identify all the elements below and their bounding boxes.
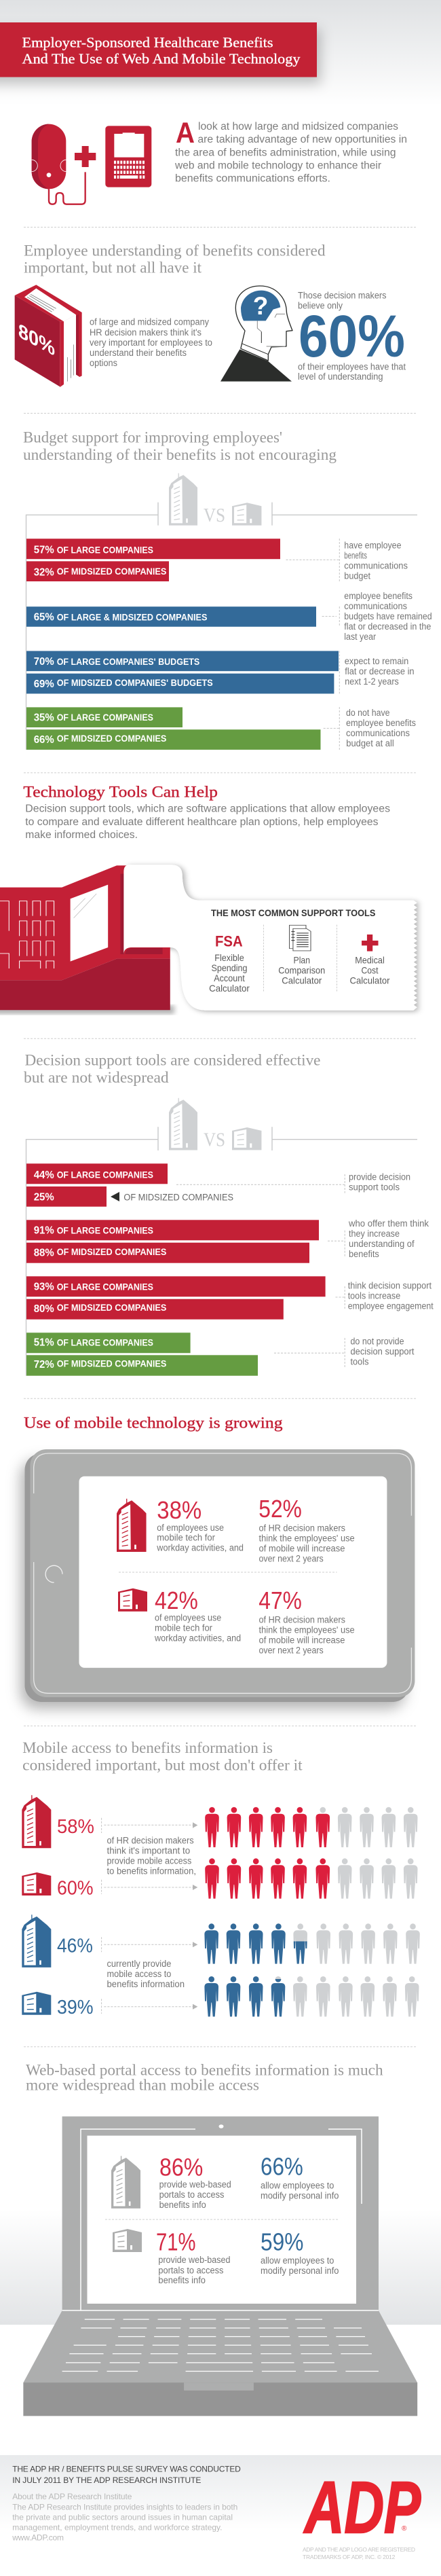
bar: 25% midsized: [26, 1186, 233, 1207]
footer: about the institute: the private and public sectors around issues in human capital: [12, 2513, 233, 2522]
heading: employee understanding: [24, 242, 326, 276]
bar: 57% large: OF LARGE COMPANIES: [57, 545, 153, 555]
stat: 60%: [298, 291, 406, 382]
people row: 39% midsized: [204, 1976, 419, 2016]
stat text: 80% of HR decision makers: [90, 316, 212, 368]
bar: 32% midsized: OF MIDSIZED COMPANIES: [57, 566, 166, 577]
stat: large companies using mobile: of HR decision makers: [259, 1523, 345, 1534]
stat: midsized companies using mobile: of HR decision makers: [259, 1614, 345, 1625]
large vs midsized header: [26, 1098, 417, 1376]
stat: midsized companies portals: portals to access: [158, 2265, 224, 2275]
bar annotations: budget: [286, 539, 432, 750]
card: [123, 865, 417, 1011]
stat: large companies using mobile: 52%: [258, 1495, 302, 1523]
title banner: And The Use of Web And Mobile Technology: [22, 50, 301, 67]
bar: 51% large: OF LARGE COMPANIES: [57, 1337, 153, 1347]
stat: large companies portals: 66%: [261, 2152, 303, 2180]
bar annotations: budget: communications: [346, 728, 410, 738]
footer: survey note: [12, 2465, 241, 2485]
stat: midsized companies using mobile: mobile tech for: [155, 1623, 212, 1633]
stat: midsized companies portals: modify personal info: [261, 2266, 339, 2276]
stat: midsized companies using mobile: of employees use: [155, 1613, 221, 1623]
stat: midsized companies portals: 59%: [261, 2228, 303, 2256]
bar annotations: budget: next 1-2 years: [345, 676, 399, 687]
bar annotations: decision tools: understanding of: [349, 1239, 415, 1249]
heading: budget support: understanding of their benefits is not encouraging: [23, 446, 337, 463]
bar: 66% midsized: 66%: [34, 734, 54, 746]
bar: 72% midsized: [26, 1355, 258, 1376]
ADP logo: ®: [402, 2525, 407, 2533]
bar: 57% large: 57%: [34, 545, 54, 556]
stat: midsized companies using mobile: over next 2 years: [259, 1645, 324, 1655]
bar annotations: budget: employee benefits: [344, 591, 413, 601]
stat: midsized companies portals: [113, 2228, 339, 2285]
stat: large companies using mobile: over next 2 years: [259, 1554, 324, 1564]
intro paragraph: the area of benefits administration, while using: [175, 147, 396, 158]
heading: use of mobile technology: Use of mobile technology is growing: [24, 1415, 283, 1432]
stat: large companies portals: modify personal info: [261, 2191, 339, 2201]
bar: 93% large: 93%: [34, 1281, 54, 1292]
illustration: building and support tools card: Medical: [355, 954, 385, 965]
trademark note: TRADEMARKS OF ADP, INC. © 2012: [303, 2554, 396, 2560]
heading: decision support tools effective: [24, 1051, 320, 1086]
bar annotations: decision tools: provide decision: [349, 1172, 410, 1182]
bar: 57% large: [26, 539, 280, 559]
heading: mobile access: [22, 1739, 303, 1774]
title banner: Employer-Sponsored Healthcare Benefits: [22, 35, 273, 51]
stat: large companies using mobile: 38%: [157, 1496, 202, 1524]
stat text: 80% of HR decision makers: HR decision makers think it's: [90, 327, 202, 338]
bar: 65% large and midsized: 65%: [34, 611, 54, 623]
red stats: important to provide mobile access: think it's important to: [107, 1845, 190, 1855]
bar: 69% midsized budgets: 69%: [34, 678, 54, 690]
trademark note: [303, 2546, 415, 2560]
illustration: building and support tools card: Cost: [361, 964, 379, 975]
icon: head with question mark: [220, 286, 292, 382]
bar: 51% large: [26, 1332, 191, 1353]
bar annotations: budget: communications: [344, 561, 408, 570]
bar: 70% large budgets: OF LARGE COMPANIES' BUDGETS: [57, 657, 199, 667]
intro paragraph: are taking advantage of new opportunities in: [197, 134, 407, 145]
stat: midsized companies portals: provide web-based: [158, 2255, 231, 2265]
heading: decision support tools effective: Decision support tools are considered effective: [24, 1051, 320, 1068]
red stats: important to provide mobile access: 58%: [57, 1816, 94, 1838]
bar annotations: budget: budgets have remained: [344, 611, 432, 621]
blue stats: currently provide mobile access: currently provide: [107, 1959, 171, 1969]
building lower base and flap: [0, 947, 170, 1010]
stat: 60%: Those decision makers: [298, 291, 387, 301]
stat: midsized companies portals: benefits info: [158, 2275, 206, 2285]
heading: technology tools can help: Technology Tools Can Help: [23, 783, 218, 800]
bar: 88% midsized: OF MIDSIZED COMPANIES: [57, 1247, 166, 1257]
heading: mobile access: Mobile access to benefits information is: [22, 1739, 273, 1756]
blue stats: currently provide mobile access: [22, 1915, 197, 2018]
stat text: 80% of HR decision makers: options: [90, 358, 117, 368]
intro paragraph: A: [176, 117, 195, 149]
bar: 44% large: [26, 1163, 168, 1184]
bar: 25% midsized: OF MIDSIZED COMPANIES: [123, 1192, 233, 1202]
icon: medical cross: [362, 935, 379, 951]
tablet body: [24, 1449, 415, 1702]
bar: 69% midsized budgets: [26, 674, 334, 693]
heading: mobile access: considered important, but most don't offer it: [22, 1757, 303, 1774]
bar: 66% midsized: OF MIDSIZED COMPANIES: [57, 733, 166, 744]
bar annotations: decision tools: they increase: [349, 1229, 400, 1239]
bar: 32% midsized: [26, 561, 169, 581]
illustration: building and support tools card: FSA: [215, 932, 243, 949]
icon: book with 80%: [15, 285, 82, 387]
icon: medical mouse and tablet: [32, 124, 151, 204]
blue stats: currently provide mobile access: 39%: [57, 1997, 94, 2018]
intro paragraph: [174, 117, 407, 184]
bar: 91% large: 91%: [34, 1225, 54, 1237]
icon: book with 80%: 80%: [18, 319, 55, 361]
stat: large companies using mobile: mobile tech for: [157, 1533, 215, 1543]
illustration: building and support tools card: Spending: [212, 962, 247, 973]
stat: midsized companies using mobile: workday activities, and: [154, 1633, 241, 1644]
bar: 32% midsized: 32%: [34, 566, 54, 579]
bar annotations: decision tools: think decision support: [348, 1281, 432, 1291]
stat: large companies using mobile: of mobile will increase: [259, 1544, 345, 1554]
illustration: building and support tools card: THE MOST COMMON SUPPORT TOOLS: [211, 908, 375, 918]
stat: large companies using mobile: [117, 1495, 355, 1564]
stat: midsized companies using mobile: think the employees' use: [259, 1625, 355, 1635]
large vs midsized header: [26, 473, 417, 750]
stat: midsized companies using mobile: 42%: [155, 1586, 198, 1614]
stat: large companies portals: provide web-based: [159, 2179, 231, 2190]
icon: plan documents: [290, 925, 311, 951]
footer: about the institute: www.ADP.com: [12, 2533, 64, 2542]
paragraph: decision support tools: make informed choices.: [25, 829, 138, 841]
bar: 44% large: OF LARGE COMPANIES: [57, 1170, 153, 1180]
bar annotations: decision tools: [176, 1172, 434, 1368]
building upper facade: [0, 865, 132, 980]
illustration: building and support tools card: Plan: [294, 954, 310, 965]
bar: 88% midsized: 88%: [34, 1247, 54, 1258]
footer: survey note: IN JULY 2011 BY THE ADP RESEARCH INSTITUTE: [12, 2475, 201, 2485]
laptop illustration: [23, 2116, 417, 2416]
heading: budget support: Budget support for improving employees': [23, 429, 282, 446]
bar: 70% large budgets: [26, 651, 339, 671]
large vs midsized header: VS: [204, 1129, 225, 1150]
bar: 35% large: 35%: [34, 712, 54, 724]
stat: large companies portals: [111, 2152, 339, 2210]
stat: midsized companies using mobile: [118, 1586, 355, 1655]
illustration: building and support tools card: [0, 865, 417, 1014]
stat: midsized companies using mobile: 47%: [258, 1586, 302, 1614]
red stats: important to provide mobile access: of HR decision makers: [107, 1835, 194, 1845]
stat: large companies using mobile: workday activities, and: [156, 1542, 244, 1553]
intro paragraph: look at how large and midsized companies: [198, 121, 398, 132]
bar annotations: decision tools: tools increase: [348, 1291, 400, 1301]
icon: head with question mark: ?: [253, 292, 268, 320]
bar: 72% midsized: 72%: [34, 1359, 54, 1371]
heading: budget support: [23, 429, 337, 463]
bar annotations: decision tools: do not provide: [350, 1336, 404, 1346]
bar annotations: budget: last year: [344, 632, 377, 642]
stat: 60%: believe only: [298, 301, 343, 311]
bar: 80% midsized: OF MIDSIZED COMPANIES: [57, 1303, 166, 1313]
people row: 60% midsized: [205, 1858, 418, 1899]
stat text: 80% of HR decision makers: understand their benefits: [90, 348, 187, 358]
bar annotations: budget: communications: [344, 601, 407, 611]
bar annotations: decision tools: employee engagement: [348, 1301, 434, 1311]
footer: about the institute: About the ADP Research Institute: [12, 2492, 132, 2501]
bar annotations: budget: expect to remain: [345, 656, 408, 666]
intro paragraph: benefits communications efforts.: [175, 173, 330, 184]
stat text: 80% of HR decision makers: very important for employees to: [90, 338, 212, 348]
intro paragraph: web and mobile technology to enhance their: [174, 160, 381, 171]
bar annotations: budget: do not have: [346, 708, 389, 718]
bar annotations: budget: flat or decrease in: [345, 666, 415, 676]
bar chart: budget support: [26, 539, 339, 750]
footer: survey note: THE ADP HR / BENEFITS PULSE SURVEY WAS CONDUCTED: [12, 2465, 241, 2474]
bar annotations: budget: budget: [344, 570, 370, 581]
bar annotations: decision tools: who offer them think: [348, 1218, 429, 1229]
footer: about the institute: management, employment trends, and workforce strategy.: [12, 2523, 222, 2533]
large vs midsized header: VS: [204, 505, 225, 526]
bar annotations: budget: benefits: [344, 550, 367, 561]
bar annotations: budget: have employee: [344, 541, 402, 550]
bar: 80% midsized: [26, 1299, 284, 1320]
stat: large companies portals: 86%: [159, 2153, 203, 2181]
blue stats: currently provide mobile access: 46%: [57, 1935, 93, 1957]
bar annotations: budget: budget at all: [346, 738, 394, 748]
stat: 60%: 60%: [299, 304, 405, 369]
stat: large companies portals: portals to access: [159, 2190, 225, 2200]
red stats: important to provide mobile access: provide mobile access: [107, 1855, 192, 1866]
bar: 93% large: OF LARGE COMPANIES: [57, 1282, 153, 1292]
bar: 88% midsized: [26, 1243, 309, 1263]
people row: 46% large: [204, 1923, 420, 1964]
stat text: 80% of HR decision makers: of large and midsized company: [90, 316, 209, 327]
laptop lid: [62, 2116, 379, 2310]
stat: large companies portals: benefits info: [159, 2200, 206, 2210]
heading: employee understanding: Employee understanding of benefits considered: [24, 242, 326, 259]
heading: web-based portal access: Web-based portal access to benefits information is much: [26, 2062, 383, 2079]
bar: 72% midsized: OF MIDSIZED COMPANIES: [57, 1358, 166, 1368]
bar annotations: decision tools: support tools: [349, 1182, 400, 1192]
bar: 51% large: 51%: [34, 1337, 54, 1348]
bar annotations: budget: flat or decreased in the: [344, 621, 431, 632]
blue stats: currently provide mobile access: mobile access to: [107, 1969, 171, 1979]
stat: midsized companies portals: allow employees to: [261, 2255, 334, 2266]
footer: about the institute: The ADP Research Institute provides insights to leaders in both: [12, 2502, 237, 2511]
illustration: building and support tools card: Flexible: [214, 952, 244, 963]
trademark note: ADP AND THE ADP LOGO ARE REGISTERED: [303, 2546, 415, 2553]
bar annotations: decision tools: decision support: [350, 1346, 415, 1356]
bar annotations: decision tools: benefits: [349, 1249, 379, 1259]
bar: 65% large and midsized: [26, 606, 316, 627]
building shadow: [0, 1005, 174, 1014]
stat: large companies using mobile: of employees use: [157, 1523, 224, 1533]
laptop base and keyboard: [23, 2310, 417, 2416]
illustration: building and support tools card: Account: [214, 973, 245, 983]
stat: 60%: level of understanding: [298, 371, 383, 382]
bar: 25% midsized: 25%: [34, 1192, 54, 1203]
blue stats: currently provide mobile access: benefits information: [107, 1979, 185, 1989]
bar: 66% midsized: [26, 729, 320, 750]
bar: 70% large budgets: 70%: [34, 656, 54, 668]
red stats: important to provide mobile access: to benefits information,: [107, 1866, 196, 1876]
people row: 58% large: [205, 1807, 418, 1847]
stat: midsized companies portals: 71%: [156, 2228, 195, 2256]
bar: 93% large: [26, 1276, 326, 1296]
illustration: building and support tools card: Calculator: [209, 983, 250, 994]
footer: about the institute: [12, 2492, 237, 2542]
red stats: important to provide mobile access: [22, 1795, 197, 1899]
bar annotations: budget: employee benefits: [346, 718, 416, 728]
stat: large companies portals: allow employees to: [261, 2180, 334, 2191]
illustration: building and support tools card: Comparison: [278, 964, 325, 975]
illustration: building and support tools card: Calculator: [282, 975, 322, 985]
stat: 60%: of their employees have that: [298, 361, 406, 372]
red stats: important to provide mobile access: 60%: [57, 1877, 94, 1899]
heading: decision support tools effective: but are not widespread: [24, 1069, 169, 1086]
paragraph: decision support tools: [25, 803, 390, 841]
bar chart: decision tools: [26, 1163, 326, 1376]
heading: web-based portal access: [26, 2062, 383, 2093]
title banner: [0, 22, 317, 77]
heading: web-based portal access: more widespread than mobile access: [26, 2076, 259, 2093]
bar: 69% midsized budgets: OF MIDSIZED COMPANIES' BUDGETS: [57, 678, 213, 688]
bar: 35% large: OF LARGE COMPANIES: [57, 712, 153, 723]
stat: large companies using mobile: think the employees' use: [259, 1534, 355, 1544]
bar: 44% large: 44%: [34, 1169, 54, 1181]
bar annotations: decision tools: tools: [350, 1356, 369, 1366]
illustration: building and support tools card: Calculator: [350, 975, 390, 985]
bar: 80% midsized: 80%: [34, 1303, 54, 1315]
stat: midsized companies using mobile: of mobile will increase: [259, 1635, 345, 1645]
bar: 65% large and midsized: OF LARGE & MIDSIZED COMPANIES: [57, 613, 208, 622]
bar: 91% large: [26, 1220, 319, 1240]
bar: 35% large: [26, 707, 183, 727]
paragraph: decision support tools: to compare and evaluate different healthcare plan options, help employees: [25, 816, 379, 828]
divider lines in card: [263, 925, 337, 992]
paragraph: decision support tools: Decision support tools, which are software applications that allow employees: [25, 803, 390, 815]
tablet illustration: [24, 1449, 415, 1702]
bar: 91% large: OF LARGE COMPANIES: [57, 1226, 153, 1236]
heading: employee understanding: important, but not all have it: [24, 259, 202, 276]
